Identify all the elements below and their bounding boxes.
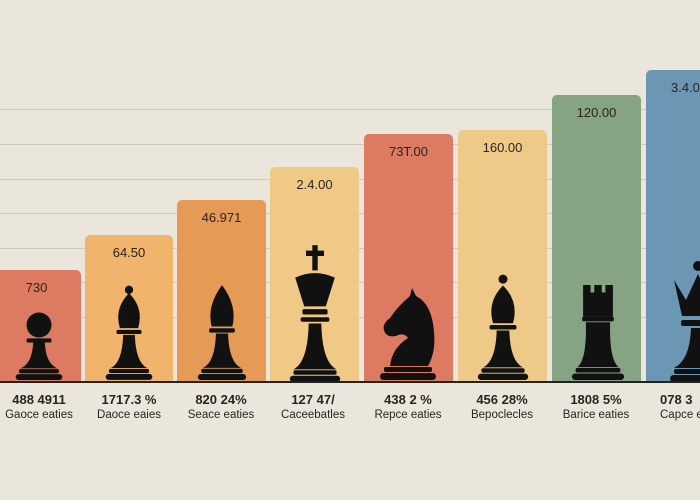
labels: 488 4911 [12,392,66,407]
bar 4 [270,167,359,382]
labels: Repce eaties [374,409,442,421]
labels: Daoce eaies [97,409,161,421]
labels: 078 3 [660,392,693,407]
icon: bishop 2 [198,285,246,380]
labels: 1717.3 % [102,392,156,407]
labels: Bepoclecles [471,409,533,421]
bar 8: 3.4.0 [671,80,700,95]
labels: Caceebatles [281,409,345,421]
labels: 820 24% [195,392,247,407]
bar 5: 73T.00 [389,144,428,159]
bar 1 [0,270,81,382]
icon: bishop 3 [478,274,528,380]
icon: pawn [16,312,62,380]
bar 8 [646,70,700,382]
bar 1: 730 [26,280,47,295]
bar 5 [364,134,453,382]
labels: 438 2 % [384,392,432,407]
icon: rook [572,285,624,380]
labels [5,392,700,421]
baseline [0,381,700,383]
labels: 127 47/ [291,392,335,407]
bar 2: 64.50 [113,245,145,260]
bar 6: 160.00 [483,140,522,155]
bar 4: 2.4.00 [296,177,333,192]
labels: 1808 5% [570,392,622,407]
labels: Seace eaties [188,409,254,421]
icon: bishop [106,286,152,380]
icon: knight [380,288,436,380]
bar 3 [177,200,266,382]
labels: Barice eaties [563,409,629,421]
labels: 456 28% [476,392,528,407]
bar chart [0,70,700,381]
bar 6 [458,130,547,382]
icon: king [290,245,340,381]
icon: queen [670,261,700,381]
bar 3: 46.971 [202,210,241,225]
bar 7: 120.00 [577,105,616,120]
bar 2 [85,235,173,382]
labels: Gaoce eaties [5,409,73,421]
bar 7 [552,95,641,382]
